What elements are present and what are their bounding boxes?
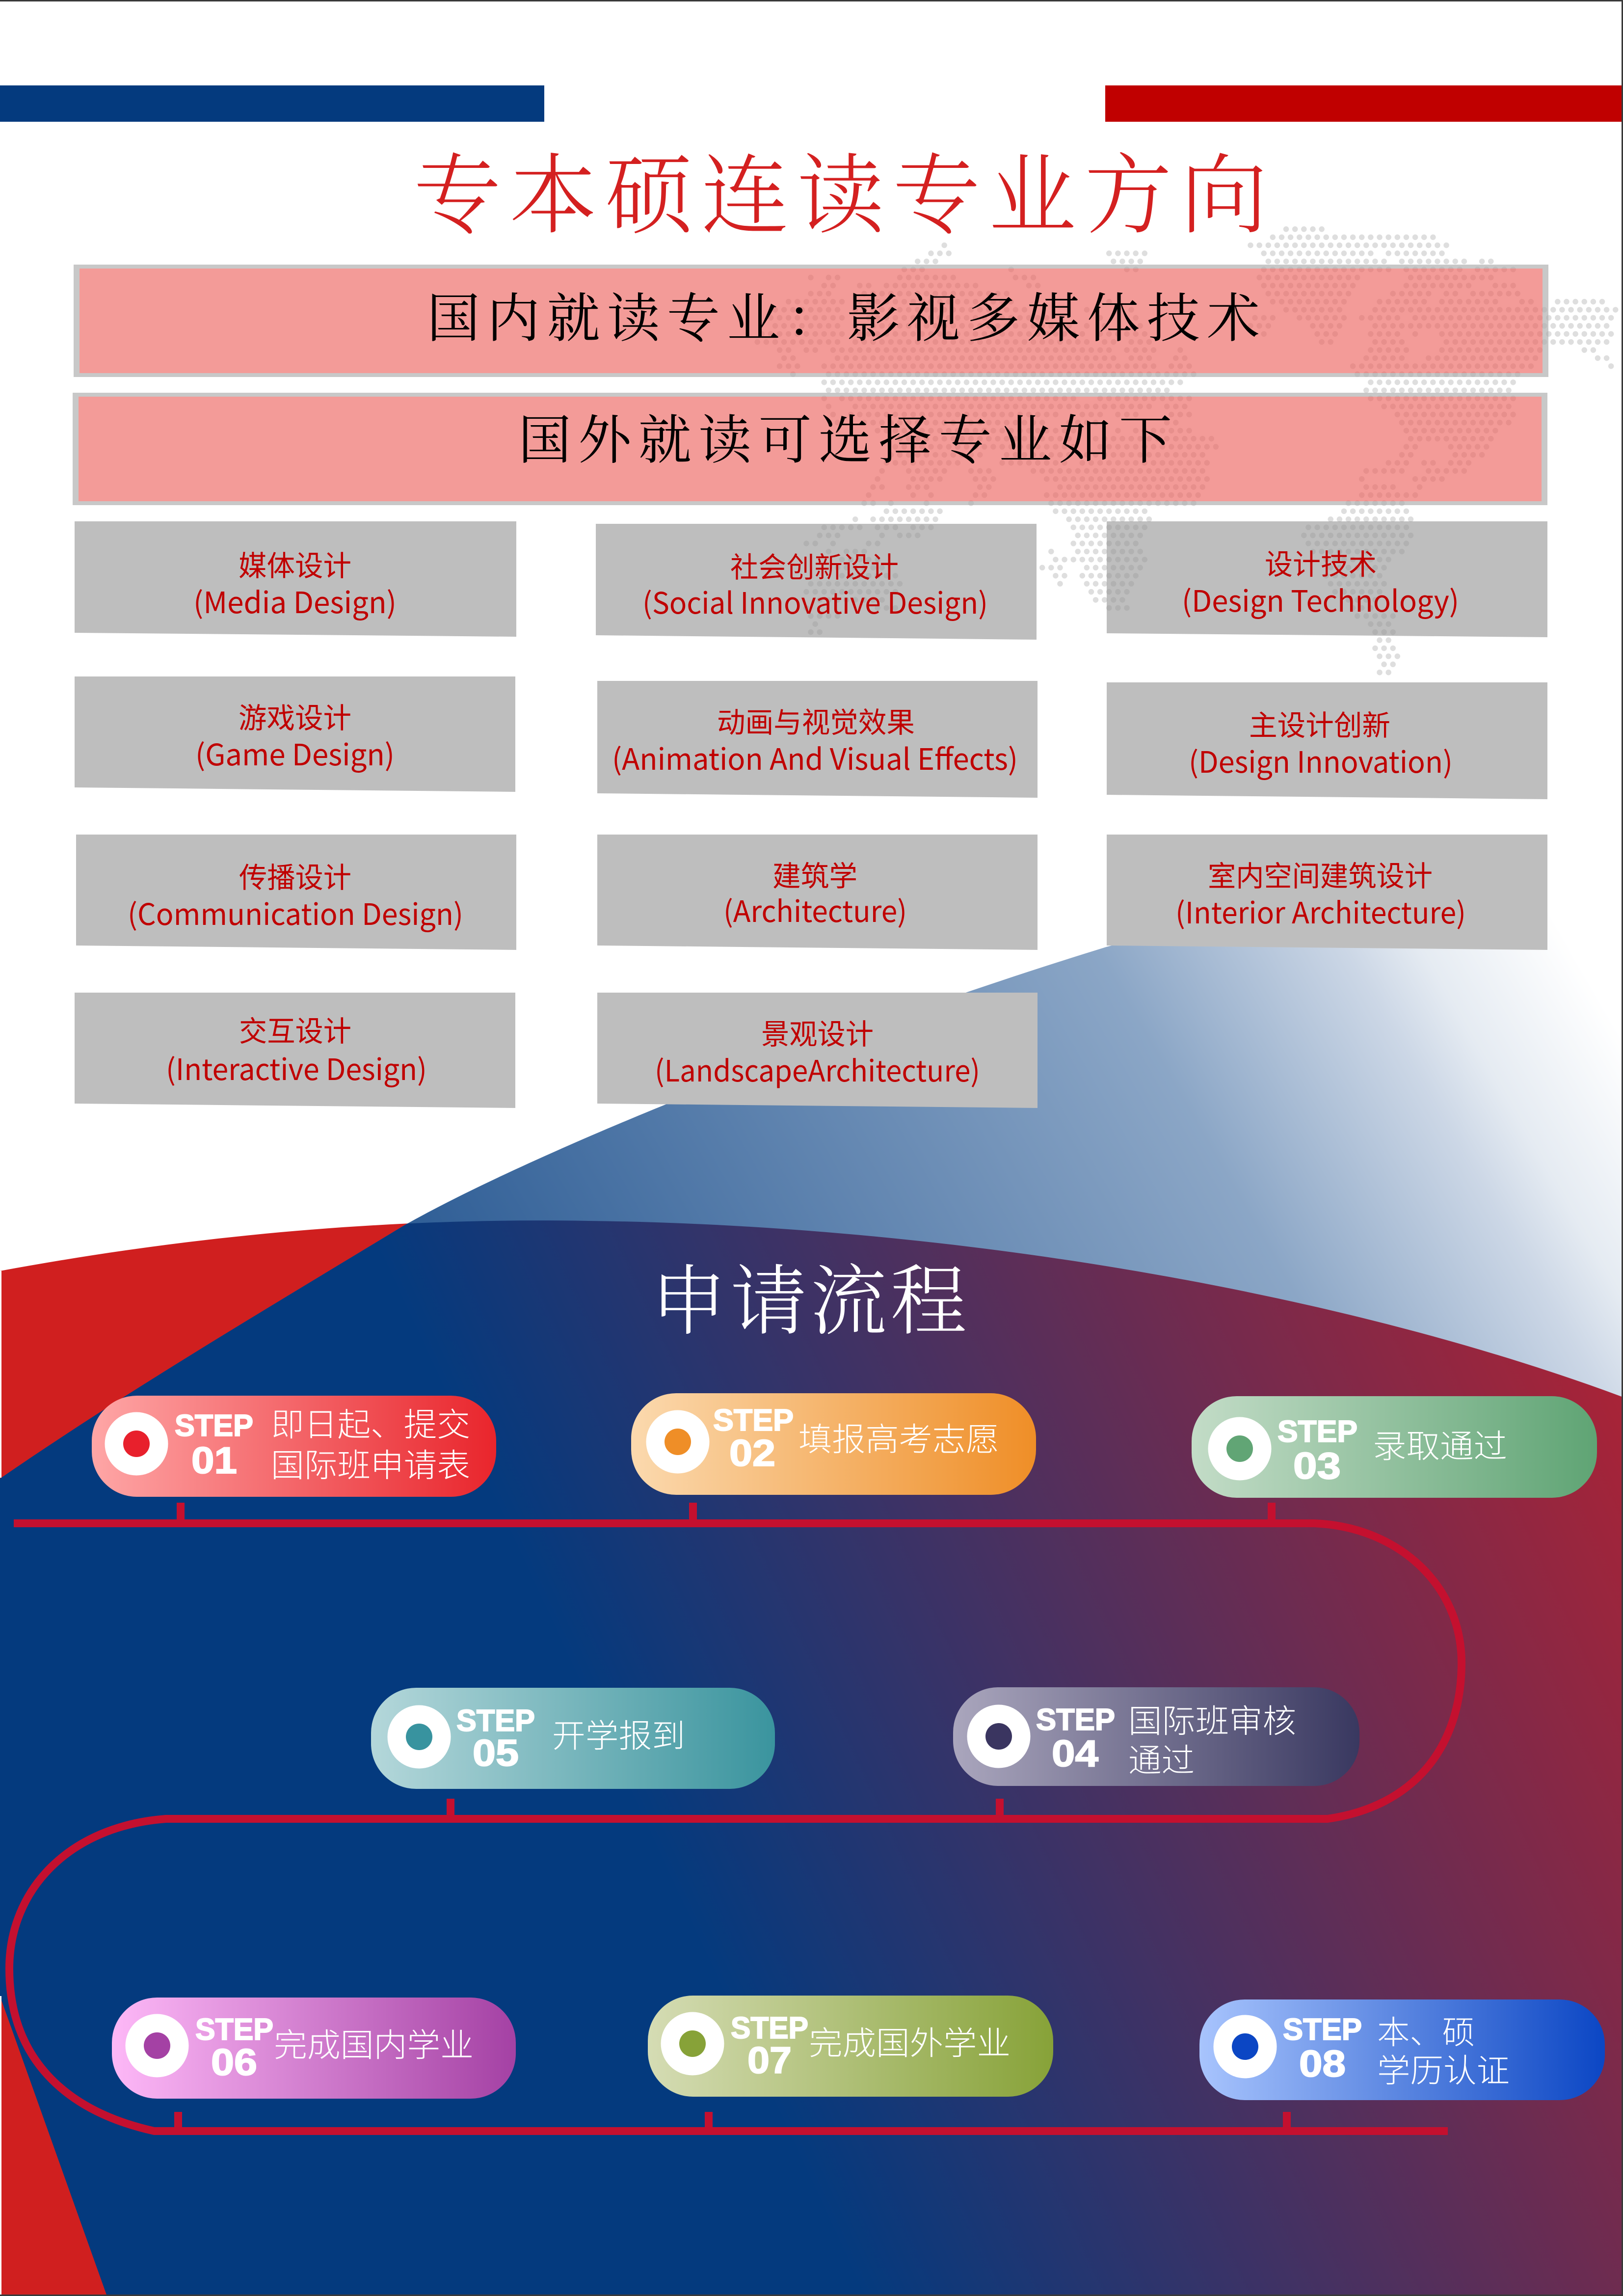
step 04 [953,1687,1359,1786]
card: media design [193,543,397,622]
card: interactive design: 交互设计 [239,1008,351,1050]
step 08: 08 [1299,2043,1346,2085]
background: blue to white swoosh [0,810,1623,2296]
card: communication design [128,855,463,934]
step 06 [112,1998,516,2099]
card: landscape architecture: 景观设计 [761,1011,874,1053]
step 05: 开学报到 [552,1710,685,1757]
top bar: blue [0,85,544,122]
step 08: 学历认证 [1377,2045,1510,2092]
step 03: STEP [1277,1415,1357,1449]
card: interior architecture: 室内空间建筑设计 [1208,853,1433,894]
card: design technology: (Design Technology) [1182,578,1459,621]
map dots seen through cards [804,521,1413,635]
step 04: 04 [1052,1733,1098,1775]
step 04: STEP [1036,1703,1115,1737]
step 03 [1192,1396,1597,1498]
card: communication design: 传播设计 [239,855,351,896]
step 05: 05 [473,1732,519,1774]
card: landscape architecture: (LandscapeArchitecture) [655,1048,980,1090]
left edge white strip [0,1271,1,2296]
card: game design: 游戏设计 [239,695,351,736]
card: interior architecture: (Interior Architecture) [1175,890,1466,932]
card: architecture: (Architecture) [723,888,907,931]
card: social innovative design [642,544,988,622]
card: design innovation: 主设计创新 [1249,702,1390,744]
card backgrounds [75,521,1547,1108]
title: 专本硕连读专业方向 [414,148,1268,245]
banner: domestic major: 国内就读专业：影视多媒体技术 [427,290,1260,349]
card: design technology: 设计技术 [1265,541,1377,583]
step 07: 完成国外学业 [809,2017,1011,2064]
step 02: 02 [729,1432,775,1474]
step 06: 完成国内学业 [274,2019,474,2066]
banner: overseas majors heading: 国外就读可选择专业如下 [518,412,1172,470]
background: red hill [0,1220,1623,2296]
step 03: 录取通过 [1373,1420,1507,1467]
timeline track [9,1503,1462,2131]
step 06: 06 [211,2042,257,2083]
step 07 [648,1996,1053,2097]
card: media design: 媒体设计 [239,543,351,584]
step 02 [631,1393,1036,1495]
card: communication design: (Communication Design) [128,891,463,934]
majors grid [75,521,1547,1108]
step 07: STEP [731,2011,808,2045]
heading: application process: 申请流程 [650,1260,967,1345]
card: social innovative design: (Social Innovative Design) [642,580,988,622]
step 07: 07 [747,2040,792,2081]
top bar: red [1105,85,1623,122]
card: design innovation: (Design Innovation) [1189,739,1453,782]
world map dots [757,229,1618,673]
card: animation and visual effects: 动画与视觉效果 [717,700,915,741]
card: game design [195,695,395,774]
step 01: 国际班申请表 [271,1439,470,1486]
card: architecture [723,853,907,931]
step 05: STEP [456,1704,535,1738]
card: design innovation [1189,702,1453,782]
card: media design: (Media Design) [193,579,397,622]
step 01: STEP [175,1409,253,1443]
card: animation and visual effects [612,700,1018,779]
card: interior architecture [1175,853,1466,932]
card: animation and visual effects: (Animation And Visual Effects) [612,736,1018,779]
background: blue to red hill gradient [0,1220,1623,2296]
card: architecture: 建筑学 [772,853,857,894]
step 01: 即日起、提交 [271,1399,470,1446]
banner: domestic major [74,265,1548,377]
step 08 [1199,1999,1605,2100]
step 02: 填报高考志愿 [798,1413,999,1460]
step 01: 01 [191,1440,237,1482]
step 04: 国际班审核 [1128,1695,1296,1742]
step 08: 本、硕 [1377,2006,1475,2053]
card: interactive design: (Interactive Design) [166,1046,427,1089]
step 02: STEP [713,1404,794,1437]
card: design technology [1182,541,1459,621]
card: social innovative design: 社会创新设计 [730,544,899,586]
step 08: STEP [1283,2013,1362,2047]
step 01 [92,1396,496,1497]
banner: overseas majors heading [73,393,1547,505]
card: landscape architecture [655,1011,980,1090]
step 06: STEP [195,2013,273,2047]
card: game design: (Game Design) [195,731,395,774]
step 05 [371,1688,775,1789]
step 04: 通过 [1128,1734,1195,1782]
step 03: 03 [1293,1445,1341,1487]
card: interactive design [166,1008,427,1089]
